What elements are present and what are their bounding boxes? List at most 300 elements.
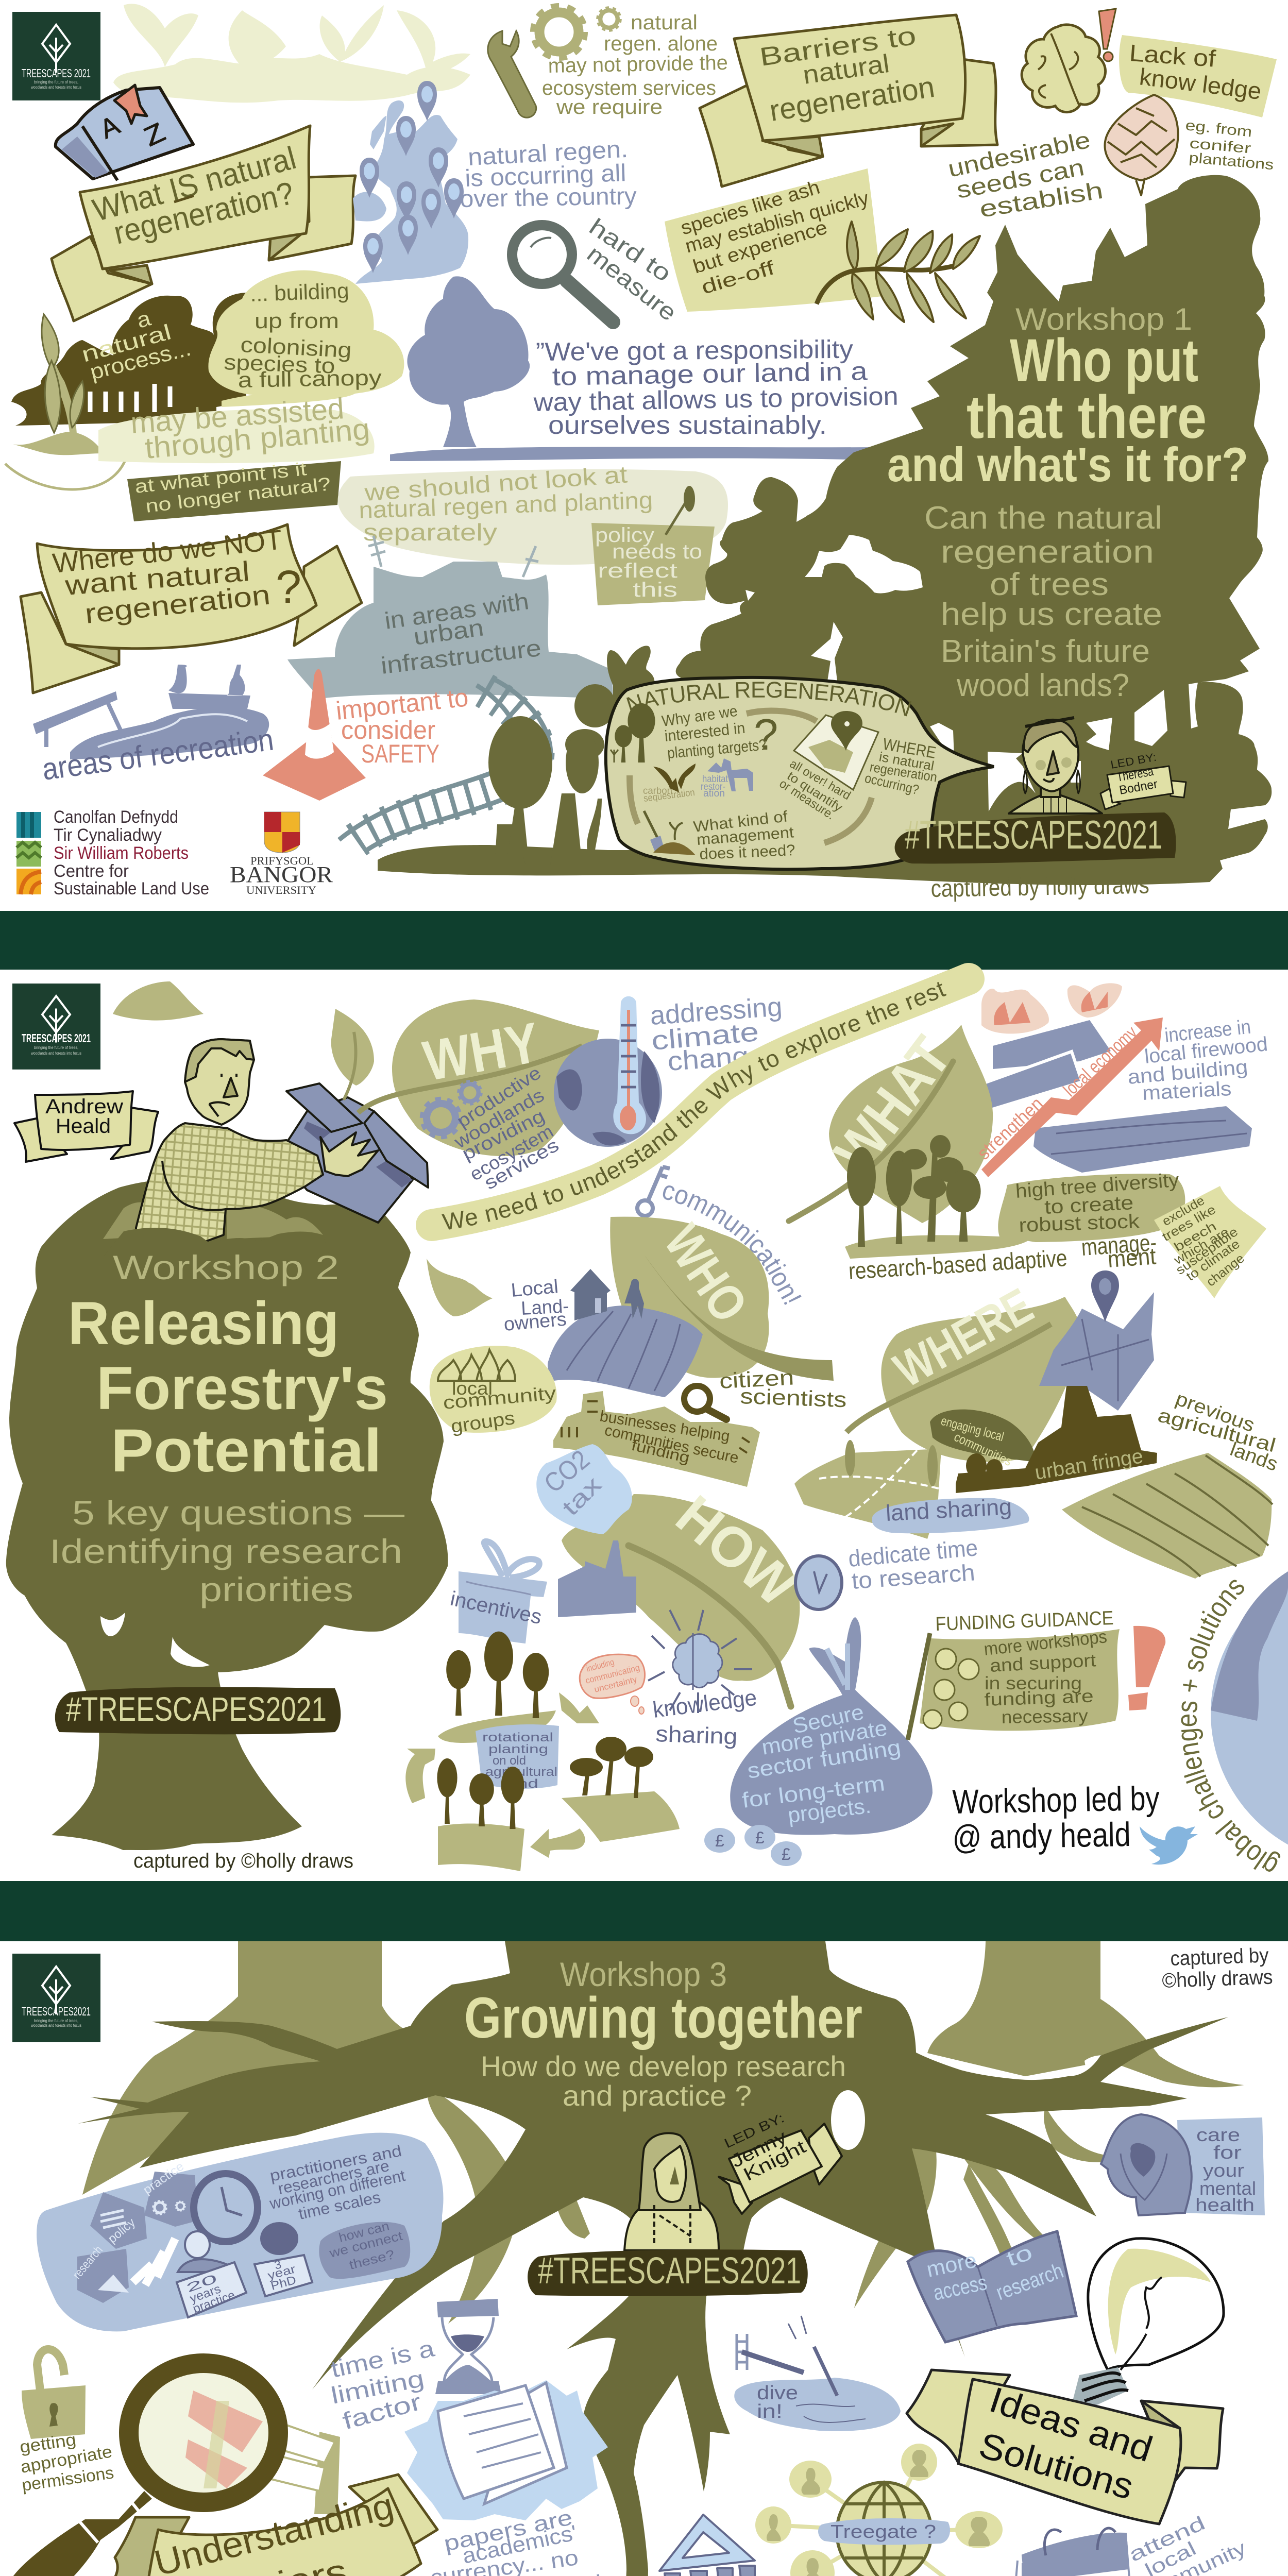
oval: engaging local communities: engaging local [939, 1414, 1005, 1444]
bubble text: where: is natural [878, 749, 936, 774]
text: natural regen alone: may not provide the [548, 52, 728, 77]
banner: what is natural regeneration: What IS natural [89, 140, 300, 229]
icon: funding bag: projects. [786, 1793, 872, 1827]
icon: open book more access to research: access [931, 2270, 989, 2305]
logo: Treescapes 2021 [12, 1954, 100, 2042]
pool: dive in: in! [757, 2401, 783, 2422]
text: important to consider safety: consider [341, 716, 435, 744]
blob: building up from colonising species: ... building [250, 278, 349, 306]
panel: policy needs to reflect this: reflect [598, 560, 677, 582]
bubble text: habitat restoration: habitat [702, 774, 728, 785]
panel: policy needs to reflect this: policy [595, 524, 654, 547]
hashtag banner workshop 3: #TREESCAPES2021 [538, 2250, 801, 2292]
panel: care for your mental health: mental [1199, 2178, 1256, 2199]
bubble text: where: WHERE [882, 734, 937, 762]
panel: at what point: no longer natural? [144, 473, 332, 517]
icon: urban fringe: urban fringe [1033, 1445, 1145, 1484]
blob: should not look at regen and planting separately: separately [363, 519, 497, 546]
bubble text: planting targets: Why are we [660, 703, 739, 730]
banner: barriers to natural regeneration: regeneration [767, 70, 937, 128]
panel: policy needs to reflect this [591, 486, 715, 605]
avatar figures [767, 2450, 990, 2576]
blob: building up from colonising species [208, 270, 404, 396]
banner: led by Jenny Knight [719, 2110, 842, 2214]
blob: may be assisted through planting: through planting [143, 412, 371, 465]
blob: local community groups: groups [449, 1407, 516, 1437]
icon: small leaf [427, 1259, 493, 1316]
field one with trees [438, 1632, 556, 1743]
pill: land sharing [872, 1494, 1029, 1533]
icon: funding bag: Secure [790, 1700, 866, 1738]
pill: treegate [818, 2518, 950, 2545]
logo: Canolfan Defnydd Tir Cynaliadwy: Sir William Roberts [54, 843, 189, 863]
icon: pound coins: £ [715, 1832, 724, 1850]
blob: should not look at regen and planting separately [338, 461, 728, 565]
hashtag banner workshop 3 [528, 2249, 808, 2296]
icon: railway track [339, 679, 551, 850]
logo: Treescapes 2021: bringing the future of trees, [34, 1045, 78, 1050]
bubble text: where: regeneration [869, 759, 938, 785]
text: undesirable seeds [945, 126, 1105, 223]
icon: hexagon policy [90, 2192, 147, 2249]
logo: Bangor University: UNIVERSITY [246, 884, 316, 896]
logo: Canolfan Defnydd Tir Cynaliadwy: Tir Cynaliadwy [54, 825, 162, 845]
icon: key [637, 1167, 670, 1216]
bubble icon: deer [707, 758, 753, 791]
box shadow [304, 1122, 413, 1188]
banner: barriers to natural regeneration: Barriers to [758, 21, 918, 72]
icon: gift incentives [459, 1541, 547, 1643]
banner: where do we not want natural regeneration: regeneration [83, 580, 272, 630]
panel: lack of knowledge [1119, 35, 1277, 117]
banner: Andrew Heald: Andrew [45, 1095, 123, 1118]
man arm line [162, 1161, 226, 1210]
box body [278, 1097, 413, 1223]
figure: 20 years practice [177, 2231, 246, 2317]
banner: where do we not want natural regeneration: want natural [63, 556, 251, 601]
icon: dictionary book: Z [140, 117, 170, 152]
bubble text: where [863, 734, 938, 798]
cycle arrows [405, 1692, 599, 1858]
icon: hexagon policy: policy [106, 2215, 138, 2246]
section: workshop 3 [8, 1941, 1280, 2576]
icon: pound coins [704, 1825, 802, 1866]
banner: ideas and solutions: Ideas and [985, 2379, 1157, 2469]
icon: pine cone [1105, 95, 1178, 195]
text: research-based adaptive management: ment [1107, 1243, 1157, 1273]
background plant silhouette [113, 4, 470, 103]
panel: species like ash: may establish quickly [683, 188, 871, 258]
text: previous agricultural lands: lands [1227, 1438, 1281, 1476]
bubble text: habitat restoration [701, 774, 728, 799]
ribbon: we need to understand the why: We need to understand the Why to explore the rest [442, 982, 947, 1230]
icon: brain [1022, 25, 1106, 112]
panel: rotational planting text: on old [493, 1754, 526, 1768]
bubble text: management: What kind of [692, 808, 789, 836]
icon: papers burst [404, 2380, 608, 2520]
icon: factory [558, 1540, 636, 1617]
bubble text: where: occurring? [863, 770, 921, 798]
portrait: Jenny Knight [624, 2133, 719, 2250]
bubble icon: map and pin [794, 711, 878, 790]
section: workshop 1 [4, 3, 1277, 903]
text: natural regen occurring: natural regen. [467, 135, 629, 171]
text: incentives: incentives [448, 1587, 544, 1629]
text: hard to measure [582, 213, 682, 326]
flag: funding guidance: more workshops [983, 1626, 1108, 1659]
panel: species like ash: die-off [699, 257, 777, 299]
quote: responsibility: to manage our land in a [552, 357, 868, 391]
banner: led by Theresa Bodner: LED BY: [1110, 751, 1158, 771]
text: increase in firewood [1127, 1016, 1269, 1105]
blob: building up from colonising species: species to [224, 350, 335, 378]
leaf: WHY: productive [453, 1062, 545, 1132]
text: local landowners: owners [503, 1308, 567, 1335]
avatar circles [755, 2444, 1003, 2576]
figure: 3 year PhD: year [266, 2262, 297, 2282]
text: undesirable seeds: undesirable [945, 126, 1093, 182]
bubble text: planting targets [660, 703, 767, 762]
text: workshop led by andy heald: Workshop led by [952, 1779, 1160, 1821]
panel: high tree diversity: to create [1044, 1192, 1134, 1218]
bubble text: management: management [696, 824, 795, 849]
note: exclude trees like beech: beech [1172, 1219, 1219, 1255]
icon: top leaf [113, 981, 204, 1021]
quote: responsibility: ourselves sustainably. [548, 411, 827, 439]
panel: at what point: at what point is it [134, 458, 308, 497]
panel: rotational planting text: agricultural [485, 1765, 557, 1779]
text: conifer plantations: plantations [1188, 149, 1275, 173]
workshop 2 title text: Identifying research [49, 1532, 402, 1570]
leaf: WHERE [846, 1278, 1082, 1462]
bubble text: hard to quantify: to quantify [785, 769, 845, 815]
banner: barriers to natural regeneration [700, 15, 997, 187]
banner: led by Jenny Knight: Jenny [727, 2126, 790, 2172]
icon: ash branch [817, 222, 980, 322]
blob: building up from colonising species: up from [255, 309, 339, 333]
panel: rotational planting text: land [502, 1777, 538, 1791]
icon: hexagon research [70, 2243, 129, 2303]
text: time is a limiting factor: time is a [328, 2334, 437, 2383]
pill: treegate: Treegate ? [831, 2521, 936, 2542]
banner: led by Theresa Bodner: Theresa [1115, 765, 1155, 785]
panel: species like ash: but experience [690, 217, 830, 278]
icon: hexagon practice [141, 2159, 198, 2227]
banner: led by Theresa Bodner [1100, 751, 1186, 809]
text: areas of recreation: areas of recreation [40, 722, 276, 787]
text: captured by holly draws: ©holly draws [1162, 1966, 1273, 1992]
banner: where do we not want natural regeneration: ? [276, 562, 301, 613]
leaf: WHAT: WHAT [822, 1025, 963, 1183]
text: conifer plantations: eg. from [1184, 117, 1253, 140]
root hole [831, 2090, 865, 2150]
icon: open book more access to research [908, 2231, 1076, 2342]
text: addressing climate change: change [667, 1040, 766, 1077]
text: hard to measure: hard to [584, 213, 676, 287]
logo: Bangor University: PRIFYSGOL [250, 854, 314, 867]
icon: sapling leaf [331, 1009, 374, 1100]
section: workshop 2 [6, 963, 1288, 1872]
text: attend local community events [1126, 2512, 1249, 2576]
workshop 1 title text: Workshop 1 [1015, 302, 1192, 336]
box left flap [286, 1083, 362, 1132]
text: addressing climate change: climate [650, 1017, 760, 1056]
bubble text: carbon sequestration: sequestration [643, 787, 696, 804]
tree: large canopy workshop 1 [378, 175, 1272, 885]
text: increase in firewood: local firewood [1143, 1033, 1269, 1068]
pill: how can we connect these [319, 2218, 410, 2279]
hashtag banner workshop 1: #TREESCAPES2021 [905, 812, 1162, 857]
text: knowledge sharing: knowledge [651, 1685, 758, 1723]
panel: rotational planting text: planting [488, 1742, 548, 1756]
man head [185, 1039, 254, 1125]
icon: clock [795, 1556, 842, 1609]
leaf: WHY: woodlands [450, 1084, 548, 1153]
workshop 1 title text: Can the natural [924, 500, 1162, 536]
panel: rotational planting text [476, 1724, 559, 1791]
icon: urban infrastructure: in areas with [383, 587, 531, 634]
icon: light bulb [1073, 2239, 1224, 2407]
workshop 1 title text: Britain's future [941, 634, 1150, 669]
text: communication: communication! [663, 1185, 802, 1305]
icon: funding bag: more private [760, 1716, 889, 1759]
white gaps in canopy [745, 535, 1198, 811]
blob: should not look at regen and planting separately: we should not look at [363, 461, 629, 506]
text: natural regen alone: we require [556, 96, 663, 118]
panel: lack of knowledge: Lack of [1128, 39, 1217, 72]
text: a natural process: a [134, 306, 154, 333]
bubble question mark: ? [754, 710, 778, 759]
divider band 1 [0, 911, 1288, 970]
text: papers are academics currency: academics' [460, 2520, 579, 2568]
field: land sharing [794, 1440, 941, 1539]
bubble text: hard to quantify: or measure. [777, 776, 837, 822]
text: knowledge sharing [651, 1685, 758, 1750]
blob: may be assisted through planting [98, 390, 375, 465]
icon: exclamation mark [1128, 1626, 1165, 1710]
workshop 3 title text [464, 1955, 862, 2112]
text: undesirable seeds: establish [977, 177, 1105, 223]
text: natural regen occurring: over the country [460, 182, 637, 212]
workshop 1 title text: wood lands? [956, 668, 1129, 703]
text: research-based adaptive management: manage- [1080, 1229, 1157, 1261]
text: a natural process: natural [79, 319, 174, 367]
icon: open book more access to research: to [1003, 2240, 1036, 2271]
text: citizen scientists: citizen [719, 1365, 794, 1393]
text: previous agricultural lands: previous [1173, 1388, 1258, 1436]
workshop 3 title text: and practice ? [563, 2079, 752, 2112]
text: addressing climate change [649, 992, 783, 1077]
text: time is a limiting factor [328, 2334, 437, 2435]
man hair [185, 1039, 254, 1082]
icon: blue tree on ground [390, 276, 877, 461]
banner: led by Jenny Knight: Knight [740, 2136, 809, 2185]
icon: pound coins: £ [782, 1845, 791, 1863]
text: important to consider safety [334, 683, 470, 768]
text: increase in firewood: increase in [1163, 1016, 1252, 1047]
logo: Treescapes 2021: woodlands and forests into focus [30, 85, 81, 90]
logo: Treescapes 2021 [12, 984, 100, 1070]
field two with trees [562, 1737, 680, 1842]
banner: ideas and solutions [907, 2370, 1223, 2524]
blob: building up from colonising species: colonising [240, 332, 352, 362]
blob: should not look at regen and planting separately: natural regen and planting [359, 486, 653, 523]
text: a natural process [79, 306, 193, 384]
panel: species like ash: species like ash [678, 177, 822, 240]
logo: Canolfan Defnydd Tir Cynaliadwy: Canolfan Defnydd [54, 807, 178, 827]
icon: temple institutions [654, 2515, 779, 2576]
bubble text: habitat restoration: restor- [701, 782, 725, 792]
figure: 20 years practice: 20 [184, 2272, 219, 2296]
text: important to consider safety: SAFETY [361, 739, 439, 768]
trees near railway [488, 646, 655, 866]
quote: responsibility [533, 335, 899, 439]
icon: bench and recreation [33, 665, 269, 759]
note: exclude trees like beech: which are [1171, 1225, 1231, 1268]
man shirt [136, 1123, 323, 1242]
text: previous agricultural lands [1156, 1388, 1281, 1476]
figure: 20 years practice: practice [191, 2288, 237, 2316]
box right flap [364, 1111, 428, 1188]
figure: 3 year PhD [255, 2223, 312, 2296]
icon: large magnifying glass [8, 2363, 278, 2576]
workshop 2 title text [49, 1248, 404, 1608]
note: exclude trees like beech: trees like [1160, 1202, 1218, 1244]
text: natural regen alone: ecosystem services [542, 77, 716, 99]
icon: planks and flames [973, 983, 1252, 1173]
icon: traffic cone [263, 669, 366, 801]
bubble text: planting targets: planting targets? [667, 736, 767, 762]
flag: funding guidance: necessary [1001, 1706, 1089, 1727]
text: natural regen occurring [460, 135, 637, 212]
cycle: rotational planting [405, 1632, 680, 1871]
icon: funding bag: sector funding [745, 1735, 903, 1783]
cloud: including communicating uncertainty: including [585, 1657, 615, 1674]
heading: natural regeneration arched: NATURAL REGENERATION [626, 682, 911, 716]
hand [320, 1132, 378, 1176]
text: conifer plantations [1184, 117, 1275, 173]
white gaps between roots [956, 2055, 1118, 2083]
text: knowledge sharing: sharing [655, 1721, 738, 1750]
text: citizen scientists: scientists [740, 1384, 847, 1412]
text: dedicate time to research: to research [851, 1559, 976, 1594]
icon: dark tree line [11, 293, 246, 426]
note: exclude trees like beech: susceptible [1173, 1225, 1241, 1278]
icon: CO2 tax cloud [536, 1444, 632, 1534]
text: time is a limiting factor: factor [340, 2388, 424, 2435]
field three with trees [437, 1758, 524, 1871]
icon: urban infrastructure [287, 536, 613, 699]
panel: species like ash [665, 168, 882, 312]
text: papers are academics currency: papers are [442, 2505, 574, 2556]
workshop 1 title text: Who put [1010, 327, 1198, 395]
logo: Treescapes 2021: TREESCAPES2021 [22, 2005, 91, 2018]
roots: back layer [82, 1941, 1244, 2324]
icon: funding bag: for long-term [740, 1771, 886, 1812]
workshop 3 title text: How do we develop research [481, 2050, 846, 2082]
panel: businesses helping communities: businesses helping [599, 1408, 731, 1445]
text: captured by holly draws: captured by ©holly draws [133, 1850, 353, 1872]
flag: funding guidance [908, 1626, 1120, 1740]
oval: engaging local communities: communities [952, 1430, 1014, 1469]
trees: what leaf [845, 1135, 1036, 1259]
text: practitioners researchers time scales: time scales [297, 2188, 382, 2223]
icon: clock [194, 2174, 258, 2242]
flag: funding guidance: and support [989, 1650, 1096, 1676]
roots: front tree base workshop 3 [78, 1941, 1228, 2576]
map: UK with location pins [353, 81, 468, 284]
text: natural regen alone [542, 11, 728, 118]
icon: twitter bird [1140, 1826, 1198, 1865]
blob: building up from colonising species: a full canopy [238, 365, 382, 392]
text: global challenges and solutions: global challenges + solutions [1181, 1580, 1281, 1872]
bubble text: carbon sequestration: carbon [643, 786, 672, 796]
workshop 2 title text: Forestry's [96, 1354, 388, 1422]
icon: hourglass [435, 2299, 501, 2394]
text: workshop led by andy heald [952, 1779, 1160, 1856]
icon: urban infrastructure: infrastructure [379, 634, 543, 679]
text: workshop led by andy heald: @ andy heald [952, 1815, 1131, 1856]
leaf: WHO [610, 1215, 834, 1381]
pill: how can we connect these: we connect [328, 2229, 404, 2261]
text: increase in firewood: and building [1127, 1056, 1249, 1089]
blob: may be assisted through planting: may be assisted [129, 392, 345, 440]
workshop 1 title text: and what's it for? [887, 437, 1248, 492]
text: natural regen occurring: is occurring all [464, 159, 626, 192]
text: papers are academics currency [429, 2505, 605, 2576]
portrait: Theresa Bodner [1009, 718, 1102, 814]
note: exclude trees like beech: to climate [1183, 1236, 1243, 1284]
icon: CO2 tax cloud: tax [556, 1471, 606, 1521]
stripes [133, 2239, 175, 2285]
icon: hexagon research: research [70, 2243, 106, 2282]
text: dedicate time to research [847, 1534, 979, 1594]
text: practitioners researchers time scales: researchers are [276, 2157, 391, 2198]
workshop 3 title text: Workshop 3 [560, 1955, 727, 1993]
man nose [224, 1078, 238, 1097]
note: exclude trees like beech: change [1204, 1251, 1247, 1290]
panel: care for your mental health [1101, 2114, 1265, 2215]
hashtag banner workshop 2 [55, 1687, 341, 1734]
logo: Treescapes 2021: bringing the future of trees, [34, 80, 78, 84]
icon: sprouting plant [5, 314, 129, 489]
flag: funding guidance: funding are [984, 1686, 1094, 1710]
workshop 2 title text: Workshop 2 [113, 1248, 339, 1286]
bubble icon: spade and mound [644, 811, 696, 855]
leaf: HOW [562, 1483, 808, 1706]
icon: pound coins: £ [755, 1828, 765, 1847]
figure: 3 year PhD: 3 [273, 2257, 283, 2272]
leaf: WHERE: WHERE [885, 1278, 1042, 1398]
flag: funding guidance: in securing [985, 1673, 1082, 1693]
hashtag banner workshop 2: #TREESCAPES2021 [66, 1690, 327, 1728]
panel: care for your mental health: care [1196, 2124, 1240, 2145]
panel: businesses helping communities: funding [630, 1437, 691, 1467]
leaf: WHAT [789, 1025, 993, 1223]
bubble text: hard to quantify: all over! hard [787, 757, 853, 803]
figure: 20 years practice: years [188, 2282, 223, 2306]
pill: land sharing: land sharing [885, 1494, 1012, 1526]
icon: globe and thermometer [554, 996, 662, 1147]
bubble text: planting targets: interested in [664, 720, 746, 745]
note: exclude trees like beech [1154, 1186, 1266, 1298]
text: getting appropriate permissions: getting [19, 2430, 77, 2456]
pill: how can we connect these: these? [348, 2247, 396, 2273]
cloud: including communicating uncertainty: uncertainty [593, 1674, 638, 1694]
icon: CO2 tax cloud: CO2 [538, 1445, 595, 1499]
workshop 2 title text: 5 key questions — [72, 1494, 404, 1532]
text: increase in firewood: materials [1142, 1078, 1232, 1105]
